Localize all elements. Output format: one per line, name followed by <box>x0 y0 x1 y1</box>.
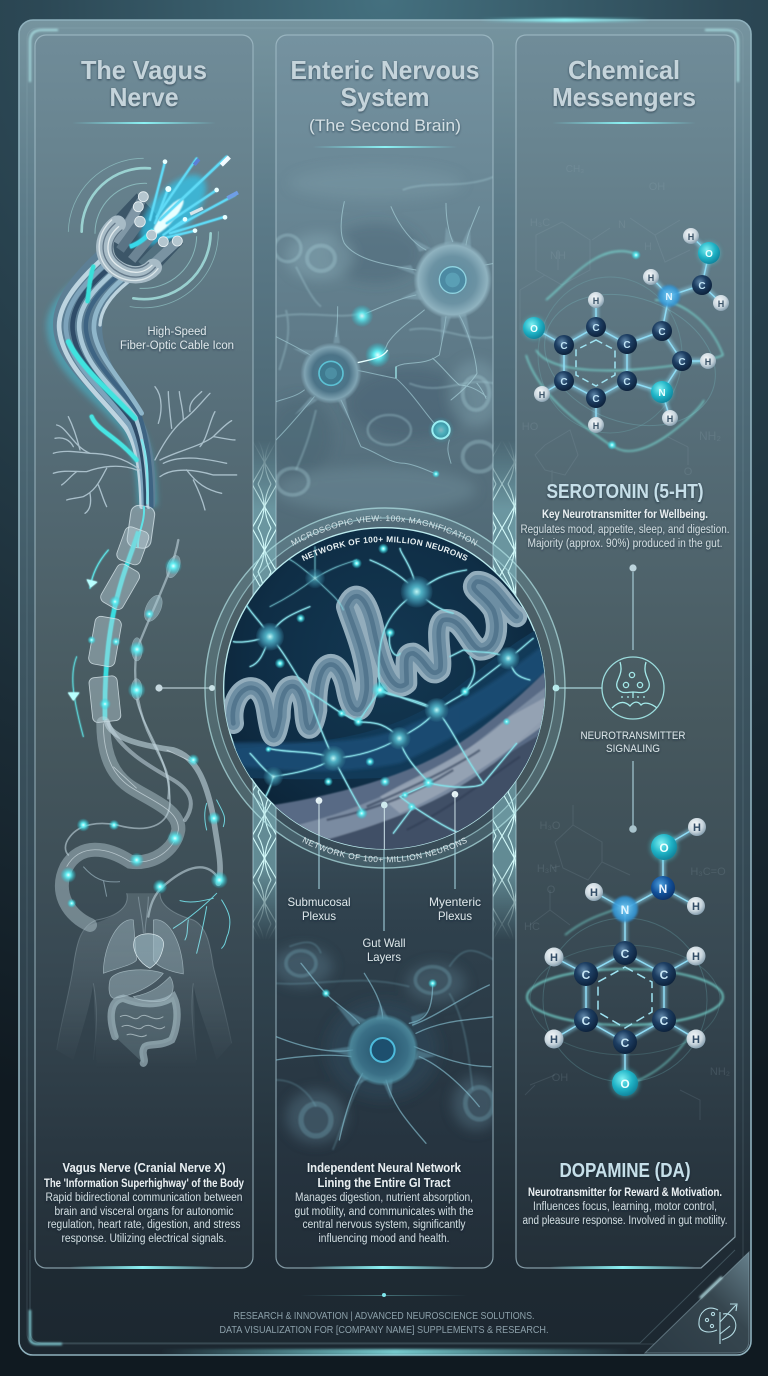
label: gut wall layers: Gut Wall <box>362 936 406 950</box>
fiber connectors <box>189 156 239 216</box>
dopamine molecule <box>527 818 723 1097</box>
label: gut wall layers: Layers <box>367 950 401 964</box>
synapses <box>321 979 437 998</box>
cable glow <box>56 270 147 507</box>
carbon atoms: C <box>582 1014 591 1028</box>
central tube and capsules <box>105 532 138 720</box>
speckled sub-villi layer <box>220 623 550 779</box>
title: the vagus nerve: Nerve <box>110 82 178 112</box>
text block: vagus nerve description: brain and visceral organs for autonomic <box>54 1206 234 1218</box>
text block: vagus nerve description: Vagus Nerve (Cranial Nerve X) <box>62 1161 226 1175</box>
carbon atoms: C <box>592 394 600 405</box>
hydrogen atoms: H <box>688 232 694 242</box>
spark heads <box>68 579 97 701</box>
label: fiber-optic cable <box>120 326 234 352</box>
label: fiber-optic cable: Fiber-Optic Cable Icon <box>120 340 234 352</box>
text block: dopamine: DOPAMINE (DA) <box>560 1160 690 1182</box>
carbon atoms: C <box>658 327 666 338</box>
title: enteric nervous system: Enteric Nervous <box>290 55 480 85</box>
hydrogen atoms: H <box>705 357 711 367</box>
orbit rings <box>527 969 723 1025</box>
carbon atoms: C <box>678 357 686 368</box>
oxygen and nitrogen atoms: O <box>620 1077 630 1091</box>
text block: dopamine: and pleasure response. Involved in gut motility. <box>522 1215 728 1227</box>
carbon atoms: C <box>698 281 706 292</box>
text block: vagus nerve description <box>44 1161 244 1245</box>
microscopic neuron field: upper enteric panel <box>266 167 503 513</box>
neuron cell bodies <box>256 568 520 787</box>
text block: vagus nerve description: regulation, heart rate, digestion, and stress <box>48 1219 241 1231</box>
hydrogen atoms: H <box>550 1034 558 1046</box>
text block: vagus nerve description: response. Utilizing electrical signals. <box>62 1233 226 1245</box>
label: myenteric plexus: Plexus <box>438 909 472 923</box>
label: myenteric plexus <box>429 895 481 923</box>
text block: serotonin: SEROTONIN (5-HT) <box>546 481 704 503</box>
microscopic neuron field: lower enteric panel <box>273 942 499 1150</box>
lungs <box>103 920 183 974</box>
hydrogen atoms: H <box>550 952 558 964</box>
footer ornament <box>300 1293 468 1297</box>
text block: dopamine <box>522 1160 728 1227</box>
text block: dopamine: Neurotransmitter for Reward & Motivation. <box>528 1185 722 1199</box>
microscopic lens <box>204 507 566 869</box>
hydrogen atoms: H <box>718 299 724 309</box>
carbon atoms: C <box>621 947 630 961</box>
label: gut wall layers <box>362 936 406 964</box>
hydrogen atoms: H <box>667 414 673 424</box>
lower neuron soma <box>300 343 362 404</box>
bundle core glow <box>130 230 153 247</box>
plexus pointer stems <box>319 794 455 850</box>
tube beads <box>60 754 228 908</box>
label: submucosal plexus: Submucosal <box>288 895 350 909</box>
title: the vagus nerve <box>81 55 207 112</box>
carbon atoms <box>574 941 676 1054</box>
hydrogen atoms: H <box>692 901 700 913</box>
faint branch <box>83 867 120 897</box>
connector: serotonin to signaling <box>629 564 637 650</box>
carbon atoms <box>554 275 712 408</box>
title: chemical messengers: Chemical <box>568 55 680 85</box>
connector: signaling to dopamine <box>629 761 637 833</box>
icon: fiber-optic cable <box>53 156 239 513</box>
liver and stomach <box>109 970 173 1002</box>
faint chemical structures: dopamine: H₃C=O <box>690 866 726 878</box>
faint chemical structures: dopamine: O <box>547 884 556 896</box>
lens outer rings <box>205 508 565 868</box>
corner chamfer <box>645 1252 749 1353</box>
carbon atoms: C <box>623 340 631 351</box>
heart <box>134 934 164 968</box>
icon: brain tree logo <box>699 1304 737 1344</box>
text block: enteric description: Manages digestion, nutrient absorption, <box>295 1192 473 1204</box>
orbit rings <box>526 251 723 451</box>
secondary strand <box>135 540 178 798</box>
tapered dendrite bases <box>293 227 473 420</box>
hydrogen atoms: H <box>648 273 654 283</box>
title: chemical messengers: Messengers <box>552 82 696 112</box>
neuron nucleus <box>371 1038 395 1062</box>
title divider: vagus <box>72 122 216 124</box>
connector: vagus to lens <box>155 684 215 692</box>
faint chemical structures: serotonin <box>520 164 721 485</box>
title: enteric nervous system <box>290 55 480 135</box>
hydrogen atoms: H <box>593 421 599 431</box>
serotonin molecule <box>523 228 734 451</box>
upper neuron nucleus <box>439 267 466 293</box>
deep tissue bands <box>220 637 553 771</box>
text block: vagus nerve description: Rapid bidirectional communication between <box>46 1192 242 1204</box>
grey muscle layers <box>240 670 547 857</box>
faint chemical structures: dopamine: HC <box>524 921 540 933</box>
plexus pointers <box>316 791 458 808</box>
hydrogen atoms: H <box>539 390 545 400</box>
oxygen and nitrogen atoms <box>523 242 720 403</box>
faint chemical structures: serotonin: N <box>618 219 626 231</box>
text block: serotonin <box>520 481 730 550</box>
dendrites <box>276 202 494 474</box>
carbon atoms: C <box>660 968 669 982</box>
lower tubes <box>62 700 220 925</box>
cable strands <box>59 257 151 507</box>
carbon atoms: C <box>621 1036 630 1050</box>
panel bottom glow accents <box>70 1266 695 1269</box>
text block: serotonin: Regulates mood, appetite, sleep, and digestion. <box>520 524 730 536</box>
title divider: chemical <box>552 122 696 124</box>
beam of light <box>137 172 209 248</box>
title: enteric nervous system: System <box>340 82 430 112</box>
faint chemical structures: serotonin: HO <box>522 421 539 433</box>
esophagus <box>138 897 148 933</box>
hydrogen atoms: H <box>593 296 599 306</box>
lens image <box>223 515 546 862</box>
hydrogen atoms: H <box>590 887 598 899</box>
footer text: RESEARCH & INNOVATION | ADVANCED NEUROSCIENCE SOLUTIONS. <box>234 1310 534 1322</box>
oxygen and nitrogen atoms <box>611 833 678 1097</box>
text block: enteric description: Lining the Entire GI Tract <box>318 1176 451 1190</box>
faint chemical structures: serotonin: NH <box>550 250 566 262</box>
hydrogen atoms: H <box>692 1034 700 1046</box>
icon: neurotransmitter signaling <box>602 657 664 719</box>
signal sparks <box>73 550 108 737</box>
faint chemical structures: serotonin: OH <box>649 181 665 193</box>
carbon atoms: C <box>623 377 631 388</box>
signal arcs <box>68 158 218 308</box>
oxygen and nitrogen atoms: O <box>705 249 713 260</box>
faint chemical structures: serotonin: CH₃ <box>566 164 584 175</box>
small intestine loops <box>120 1015 165 1037</box>
connector: lens to signaling icon <box>553 685 602 691</box>
text block: serotonin: Majority (approx. 90%) produced in the gut. <box>528 538 722 550</box>
hydrogen atoms <box>534 228 729 433</box>
carbon atoms: C <box>560 341 568 352</box>
tissue clouds <box>273 947 499 1143</box>
label: neurotransmitter signaling: SIGNALING <box>606 743 660 755</box>
neuron soma <box>347 1014 419 1086</box>
upper neuron soma <box>413 241 492 319</box>
oxygen and nitrogen atoms: N <box>659 882 667 896</box>
hydrogen atoms: H <box>693 822 701 834</box>
cable body <box>53 250 155 507</box>
neural network <box>233 547 533 833</box>
hydrogen atoms: H <box>692 951 700 963</box>
glowing beads on trunk <box>87 596 121 710</box>
label: submucosal plexus: Plexus <box>302 909 336 923</box>
faded background cells <box>276 942 494 1150</box>
title: chemical messengers <box>552 55 696 112</box>
text block: enteric description: gut motility, and communicates with the <box>294 1206 474 1218</box>
cable interior <box>108 193 183 272</box>
lower neuron nucleus <box>319 361 343 385</box>
label: submucosal plexus <box>288 895 350 923</box>
hydrogen atoms <box>544 818 706 1048</box>
teal nerve endings <box>173 800 230 953</box>
oxygen and nitrogen atoms: O <box>530 324 538 335</box>
text block: serotonin: Key Neurotransmitter for Wellbeing. <box>542 507 708 521</box>
tapered dendrite bases <box>328 1003 436 1100</box>
faint chemical structures: dopamine: H₃N <box>537 863 557 875</box>
tube highlights <box>67 723 195 867</box>
label: neurotransmitter signaling: NEUROTRANSMITTER <box>580 730 686 742</box>
label: neurotransmitter signaling <box>580 730 686 755</box>
text block: enteric description: influencing mood and health. <box>318 1233 450 1245</box>
panel: enteric nervous system background <box>276 35 493 1268</box>
nerve branches <box>53 387 237 513</box>
faint chemical structures: serotonin: H₃C <box>530 217 550 229</box>
lens text: network lower: NETWORK OF 100+ MILLION NEURONS <box>302 837 467 862</box>
illustration: nerve trunk and body <box>57 525 232 1070</box>
carbon atoms: C <box>592 323 600 334</box>
text block: vagus nerve description: The 'Information Superhighway' of the Body <box>44 1176 244 1190</box>
footer text <box>220 1310 548 1336</box>
label: myenteric plexus: Myenteric <box>429 895 481 909</box>
plexus leader lines <box>319 794 455 931</box>
human torso <box>57 893 232 1070</box>
carbon atoms: C <box>560 377 568 388</box>
text block: enteric description <box>294 1161 474 1245</box>
title: enteric nervous system: (The Second Brain) <box>309 116 461 135</box>
carbon atoms: C <box>582 968 591 982</box>
faded background cells <box>274 177 496 495</box>
faint chemical structures: dopamine <box>524 805 730 1120</box>
carbon atoms: C <box>660 1014 669 1028</box>
bonds <box>554 827 697 1083</box>
oxygen and nitrogen atoms: O <box>659 841 669 855</box>
text block: enteric description: Independent Neural Network <box>307 1161 461 1175</box>
oxygen and nitrogen atoms: N <box>621 903 629 917</box>
fiber end caps <box>133 192 182 247</box>
panel: vagus nerve background <box>35 35 253 1268</box>
fiber bundles <box>117 200 176 268</box>
lens text: microscopic view: MICROSCOPIC VIEW: 100x MAGNIFICATION <box>290 515 478 546</box>
glowing fiber tips <box>163 159 227 233</box>
faint chemical structures: dopamine: NH₂ <box>710 1066 730 1078</box>
dendrites <box>276 963 494 1143</box>
villi folds <box>233 582 517 736</box>
label: fiber-optic cable: High-Speed <box>148 326 206 338</box>
mottled tissue clouds <box>276 224 492 512</box>
oxygen and nitrogen atoms: N <box>658 388 666 399</box>
faint chemical structures: serotonin: H <box>644 241 652 253</box>
cable wrap ring <box>99 220 158 280</box>
illustration: nerve capsule upper <box>126 504 156 549</box>
footer text: DATA VISUALIZATION FOR [COMPANY NAME] SUPPLEMENTS & RESEARCH. <box>220 1324 548 1336</box>
title divider: enteric <box>313 146 457 148</box>
panel: chemical messengers background <box>516 35 735 1268</box>
intestines <box>111 997 177 1063</box>
faint chemical structures: serotonin: NH₂ <box>699 429 721 443</box>
oxygen and nitrogen atoms: N <box>665 292 673 303</box>
faint chemical structures: dopamine: H₃O <box>540 820 561 832</box>
text block: dopamine: Influences focus, learning, motor control, <box>533 1201 717 1213</box>
glowing nodes <box>265 543 511 819</box>
bonds <box>534 236 721 425</box>
title: the vagus nerve: The Vagus <box>81 55 207 85</box>
glowing synapses <box>351 305 454 478</box>
text block: enteric description: central nervous system, significantly <box>302 1219 466 1231</box>
lens text: network upper: NETWORK OF 100+ MILLION NEURONS <box>302 536 468 561</box>
faint chemical structures: serotonin: O <box>684 466 693 478</box>
strand beads <box>128 557 182 699</box>
fibers fanning out <box>150 157 235 238</box>
faint chemical structures: dopamine: OH <box>552 1072 568 1084</box>
lattice strips between panels <box>253 440 516 940</box>
